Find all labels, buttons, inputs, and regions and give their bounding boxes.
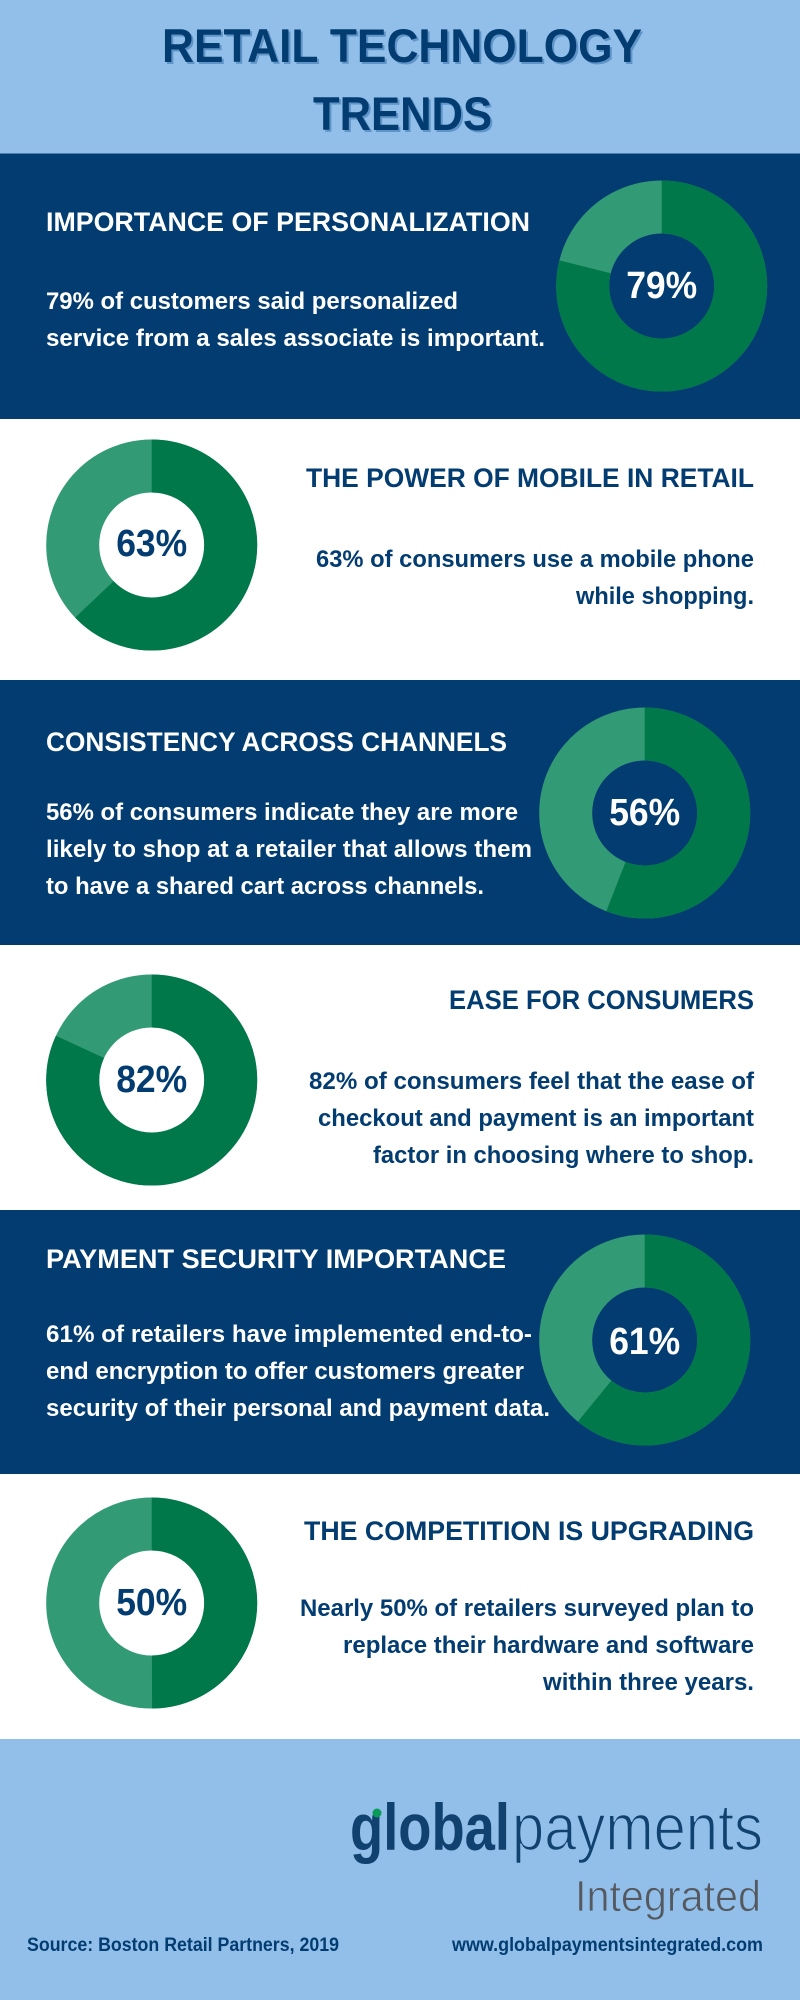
heading: CONSISTENCY ACROSS CHANNELS [46, 727, 507, 757]
body text: replace their hardware and software [343, 1632, 754, 1659]
heading: THE COMPETITION IS UPGRADING [304, 1516, 754, 1546]
logo: Integrated [575, 1872, 761, 1921]
panel: ease for consumers [0, 945, 800, 1210]
donut chart: 63% [73, 466, 231, 624]
body text [46, 1321, 550, 1422]
website url: www.globalpaymentsintegrated.com [451, 1935, 763, 1956]
title [162, 19, 642, 140]
body text: end encryption to offer customers greater [46, 1358, 524, 1385]
heading: PAYMENT SECURITY IMPORTANCE [46, 1244, 506, 1274]
donut chart: 63%: 63% [116, 523, 187, 565]
panel: consistency across channels [0, 680, 800, 945]
logo [350, 1790, 763, 1921]
body text: checkout and payment is an important [318, 1105, 754, 1132]
heading: IMPORTANCE OF PERSONALIZATION [46, 207, 530, 237]
body text: security of their personal and payment data. [46, 1395, 550, 1422]
logo: global [350, 1790, 510, 1864]
body text: service from a sales associate is important. [46, 325, 545, 352]
panel: payment security importance [0, 1210, 800, 1474]
panel: competition is upgrading [0, 1474, 800, 1739]
panel: header [0, 0, 800, 154]
donut chart: 82% [73, 1001, 231, 1159]
donut chart: 61%: 61% [609, 1321, 680, 1363]
title: TRENDS [313, 87, 492, 140]
body text [316, 546, 754, 610]
heading: THE POWER OF MOBILE IN RETAIL [306, 463, 754, 493]
body text: within three years. [542, 1669, 754, 1696]
donut chart: 79%: 79% [626, 265, 697, 307]
source note: Source: Boston Retail Partners, 2019 [27, 1935, 339, 1956]
panel: footer [0, 1739, 800, 2000]
donut chart: 56%: 56% [609, 792, 680, 834]
body text: 82% of consumers feel that the ease of [309, 1068, 755, 1095]
heading: EASE FOR CONSUMERS [449, 985, 754, 1015]
body text: while shopping. [575, 583, 754, 610]
body text [300, 1595, 754, 1696]
panel: importance of personalization [0, 154, 800, 419]
body text: 63% of consumers use a mobile phone [316, 546, 754, 573]
donut chart: 50%: 50% [116, 1582, 187, 1624]
donut chart: 61% [566, 1261, 724, 1419]
title: RETAIL TECHNOLOGY [162, 19, 642, 72]
body text: likely to shop at a retailer that allows them [46, 836, 532, 863]
body text: factor in choosing where to shop. [373, 1142, 754, 1169]
body text: 61% of retailers have implemented end-to- [46, 1321, 532, 1348]
body text: Nearly 50% of retailers surveyed plan to [300, 1595, 754, 1622]
donut chart: 56% [566, 734, 724, 892]
body text [46, 288, 545, 352]
logo: payments [512, 1790, 763, 1864]
donut chart: 79% [583, 207, 741, 365]
body text: 79% of customers said personalized [46, 288, 458, 315]
body text [309, 1068, 755, 1169]
body text [46, 799, 532, 900]
body text: 56% of consumers indicate they are more [46, 799, 518, 826]
body text: to have a shared cart across channels. [46, 873, 484, 900]
donut chart: 82%: 82% [116, 1059, 187, 1101]
donut chart: 50% [73, 1524, 231, 1682]
panel: power of mobile [0, 419, 800, 680]
